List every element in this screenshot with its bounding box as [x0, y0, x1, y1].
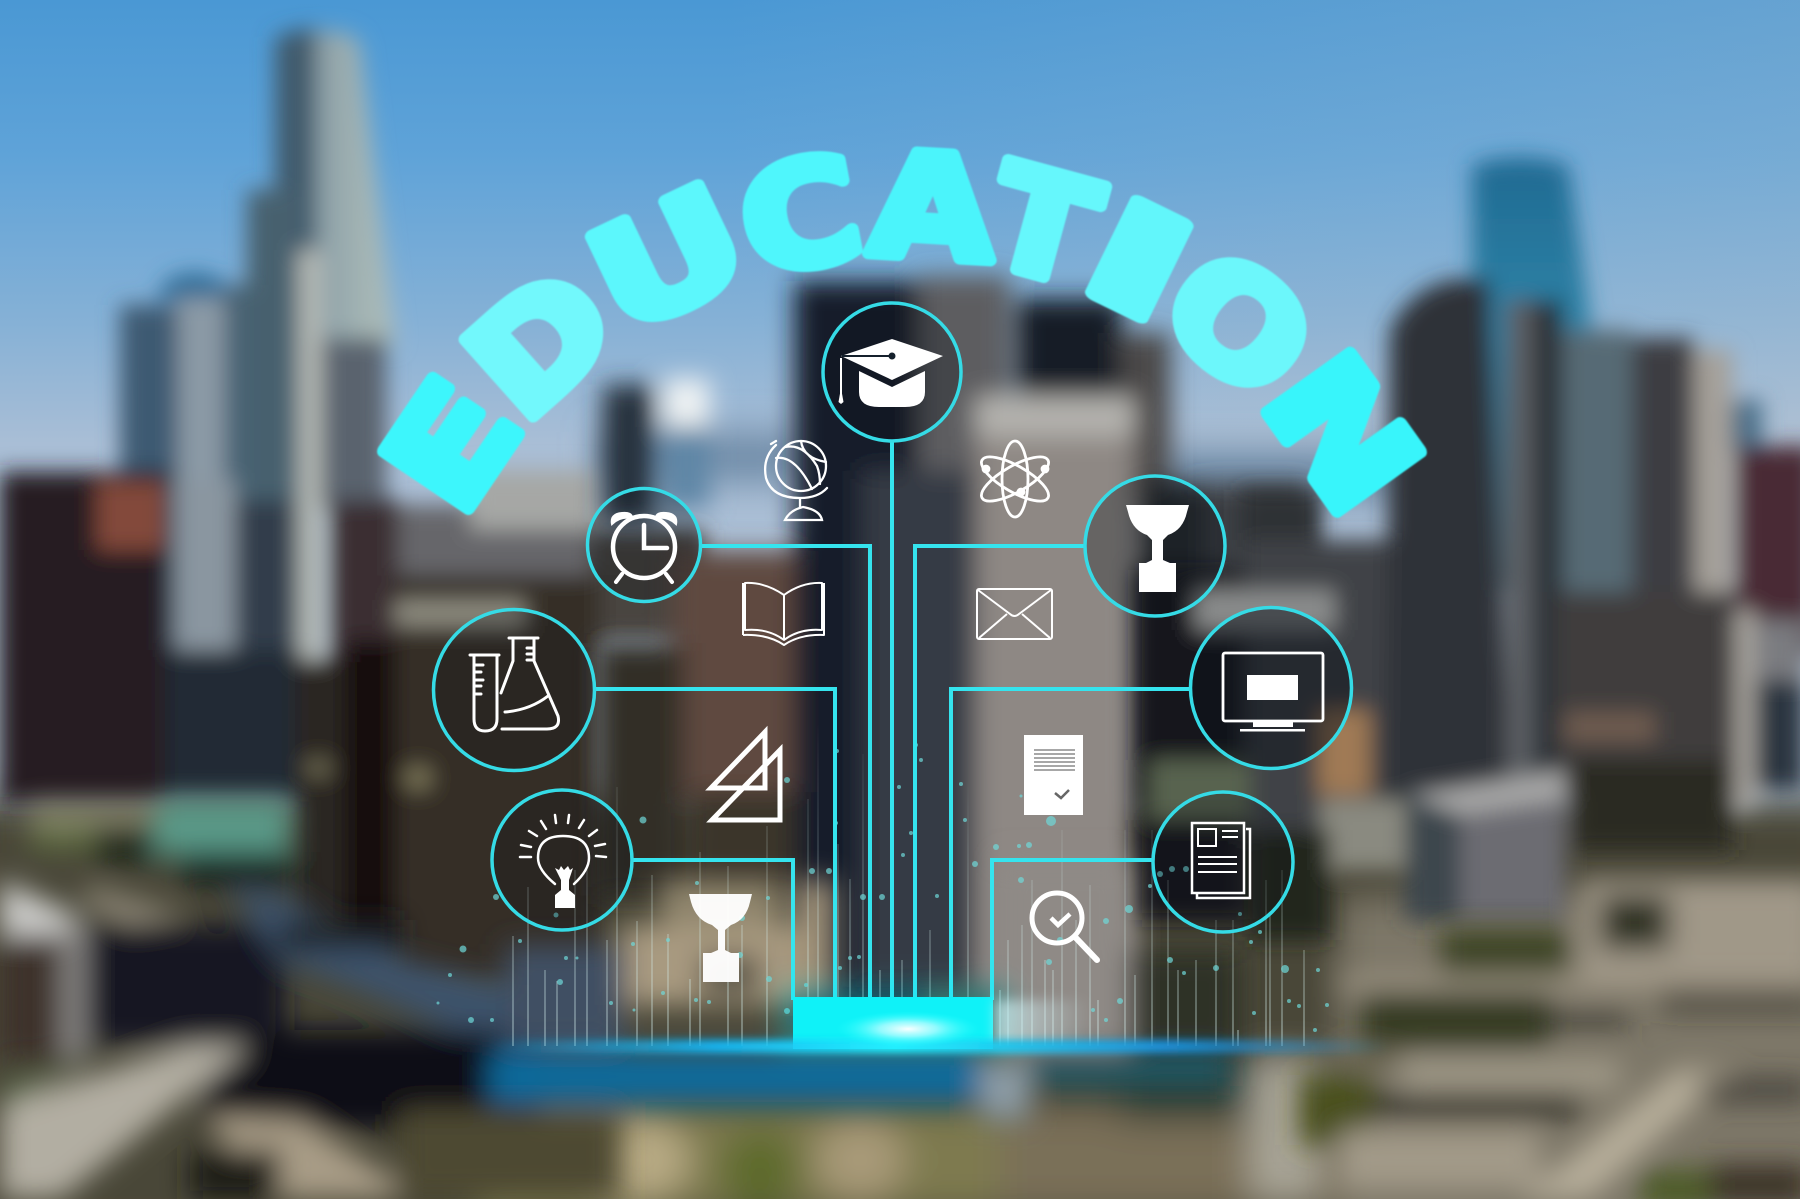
title: EDUCATION arched: T	[972, 132, 1114, 320]
title: EDUCATION arched	[351, 122, 1452, 544]
icon ring: light bulb	[492, 790, 632, 930]
icon ring: newspaper	[1153, 792, 1293, 932]
blue reflection	[490, 1052, 980, 1102]
title: EDUCATION arched: E	[351, 351, 553, 540]
hub glow base	[490, 985, 1390, 1053]
icon: envelope	[977, 589, 1052, 639]
icon ring: monitor	[1190, 608, 1352, 768]
title: EDUCATION arched: I	[1059, 166, 1217, 357]
ground left	[30, 805, 290, 827]
connector lines	[595, 442, 1190, 1000]
title: EDUCATION arched: N	[1230, 325, 1452, 544]
title: EDUCATION arched: D	[435, 237, 647, 452]
title: EDUCATION arched: U	[565, 153, 771, 367]
light streaks and particles	[436, 722, 1329, 1046]
icon: set squares	[711, 732, 780, 820]
ground centre	[660, 880, 780, 930]
icon: magnifier	[1032, 893, 1097, 960]
mid towers	[603, 385, 654, 522]
centre towers	[794, 281, 921, 1016]
icon: globe	[765, 441, 827, 520]
icon: checked document	[1024, 735, 1083, 815]
title: EDUCATION arched: A	[866, 122, 998, 294]
icon: atom	[976, 441, 1054, 517]
icon ring: trophy	[1085, 476, 1225, 616]
right towers	[1472, 158, 1630, 590]
icon: open book	[743, 583, 824, 645]
title: EDUCATION arched: O	[1132, 217, 1343, 433]
grey box building	[1455, 790, 1565, 920]
ground right	[1580, 880, 1800, 975]
icon: trophy lower	[689, 894, 752, 982]
icon ring: alarm clock	[588, 488, 700, 602]
icon ring: graduation cap	[823, 303, 961, 441]
right-of-centre blocks	[1135, 570, 1245, 920]
icon ring: test tube and flask	[434, 610, 594, 770]
title: EDUCATION arched: C	[728, 124, 873, 309]
left towers	[120, 305, 180, 485]
